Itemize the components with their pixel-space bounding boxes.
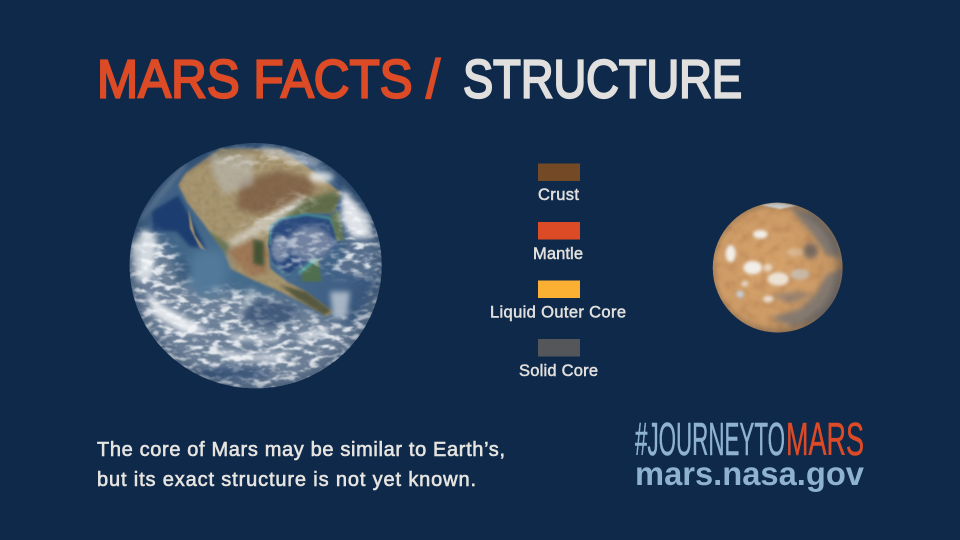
earth dark lower patches [172,259,298,379]
legend item: crust [538,164,580,204]
mars north polar cap [760,202,797,209]
title: Mars Facts: MARS FACTS / [97,50,440,110]
caption line 1: The core of Mars may be similar to Earth’s, [97,439,505,461]
caption line 2: but its exact structure is not yet known. [97,469,476,491]
mars limb shading [713,203,843,333]
legend item: crust: Crust [538,186,579,204]
legend item: mantle [533,222,583,263]
legend item: liquid outer core: Liquid Outer Core [490,304,626,322]
logo: Journey to Mars: #JOURNEYTO [635,413,785,465]
earth lower cloud haze [120,232,390,395]
earth Atlantic [340,199,382,284]
title: Structure: STRUCTURE [463,50,742,110]
illustration: Mars globe [710,200,847,337]
website: mars.nasa.gov [635,455,865,492]
earth Yucatan [302,258,322,282]
caption [97,439,505,491]
earth Pacific near Baja [152,195,207,250]
legend [490,164,626,380]
earth open Pacific [183,248,228,298]
illustration: Earth globe [120,135,390,395]
earth limb shading [130,143,382,388]
earth Florida [330,210,344,242]
legend item: solid core: Solid Core [519,362,598,380]
earth cloud texture [130,144,382,388]
legend item: mantle: Mantle [533,245,583,263]
mars dark regions [770,207,843,327]
hashtag: Mars: MARS [786,413,864,465]
earth land [177,145,347,322]
legend item: liquid outer core [490,280,626,322]
mars surface texture [713,208,824,332]
earth Gulf of Mexico [268,213,342,273]
earth ocean [130,143,382,388]
mars white clouds [726,230,809,302]
title [97,50,742,110]
legend item: solid core [519,339,598,380]
logo: Journey to Mars [635,413,865,492]
earth cloud masses [130,145,374,362]
mars base [713,203,843,333]
earth Gulf cloud cover [287,227,333,260]
